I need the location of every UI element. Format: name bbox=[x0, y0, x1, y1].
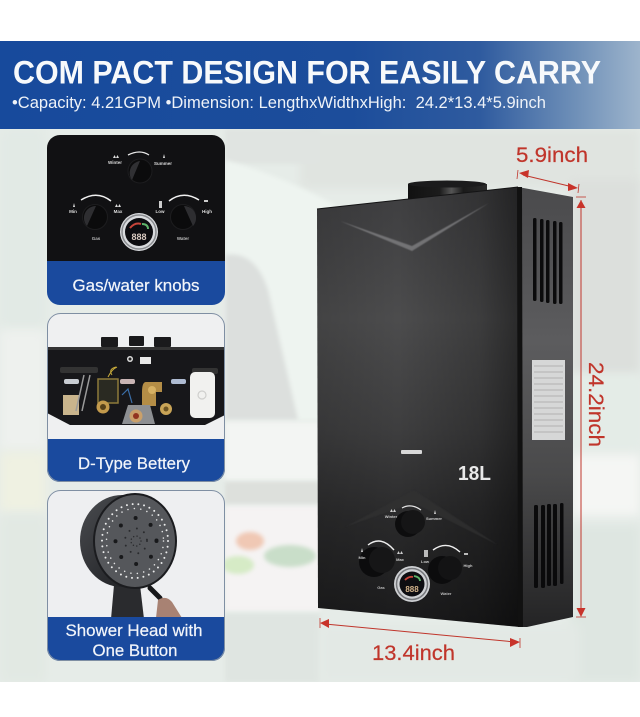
icon: winter/summer knob: Winter bbox=[108, 160, 122, 165]
dimension: depth 5.9inch: 5.9inch bbox=[516, 144, 588, 167]
title: COM PACT DESIGN FOR EASILY CARRY bbox=[13, 54, 601, 90]
icon: winter/summer knob: Summer bbox=[154, 161, 172, 166]
icon: gas knob: Gas bbox=[92, 236, 101, 241]
icon: water knob: High bbox=[202, 209, 212, 214]
panel: gas/water knobs bbox=[47, 135, 225, 305]
indicator window bbox=[401, 450, 422, 454]
lower chevron bbox=[345, 490, 498, 545]
label: Gas/water knobs bbox=[72, 277, 200, 295]
card outlines bbox=[48, 314, 224, 660]
icon: digital display bbox=[120, 213, 158, 251]
icon: digital display: 888 bbox=[131, 232, 147, 242]
knob: winter/summer bbox=[385, 506, 442, 537]
heater flue bbox=[408, 180, 487, 199]
label: One Button bbox=[92, 642, 178, 660]
label: Shower Head with bbox=[66, 622, 202, 640]
water heater product bbox=[317, 180, 573, 627]
digital display: 888 bbox=[405, 585, 419, 594]
panel: shower head bbox=[47, 490, 225, 661]
knob: gas: Min bbox=[359, 555, 366, 560]
icon: gas knob bbox=[69, 195, 123, 241]
label: D-Type Bettery bbox=[78, 455, 191, 473]
upper vents bbox=[533, 218, 562, 304]
icon: gas knob: Min bbox=[69, 209, 77, 214]
icon: water knob: Water bbox=[177, 236, 189, 241]
icon: water knob: Low bbox=[156, 209, 165, 214]
dimension: width 13.4inch: 13.4inch bbox=[372, 642, 455, 665]
illustration: heater internals bbox=[47, 336, 225, 425]
illustration: shower head with button bbox=[80, 493, 182, 619]
label bbox=[66, 624, 202, 656]
dimension: width 13.4inch bbox=[320, 618, 520, 665]
capacity mark: 18L bbox=[458, 463, 491, 485]
digital display bbox=[394, 566, 430, 602]
icon: winter/summer knob bbox=[108, 152, 172, 183]
heater side face bbox=[518, 187, 573, 627]
spec label sticker bbox=[532, 360, 565, 440]
background: blurred camping scene bbox=[0, 129, 640, 682]
knob: winter/summer: Summer bbox=[426, 516, 442, 521]
title banner bbox=[0, 41, 640, 129]
subtitle: specifications: •Capacity: 4.21GPM •Dimension: LengthxWidthxHigh: 24.2*13.4*5.9inch bbox=[12, 94, 546, 112]
icon: gas knob: Max bbox=[114, 209, 123, 214]
icon: water knob bbox=[156, 195, 212, 241]
knob: gas bbox=[359, 541, 405, 590]
knob: water: Low bbox=[421, 559, 430, 564]
knob: water: High bbox=[464, 563, 473, 568]
knob: winter/summer: Winter bbox=[385, 514, 398, 519]
knob: water bbox=[421, 545, 473, 596]
knob: water: Water bbox=[441, 591, 452, 596]
heater front face bbox=[317, 187, 520, 627]
chevron on front bbox=[340, 203, 489, 251]
panel: D-type battery bbox=[47, 313, 225, 482]
lower vents bbox=[534, 503, 564, 588]
dimension: height 24.2inch: 24.2inch bbox=[584, 362, 607, 447]
dimension: depth 5.9inch bbox=[516, 144, 588, 193]
dimension: height 24.2inch bbox=[576, 197, 607, 617]
knob: gas: Max bbox=[396, 557, 405, 562]
knob: gas: Gas bbox=[377, 585, 386, 590]
